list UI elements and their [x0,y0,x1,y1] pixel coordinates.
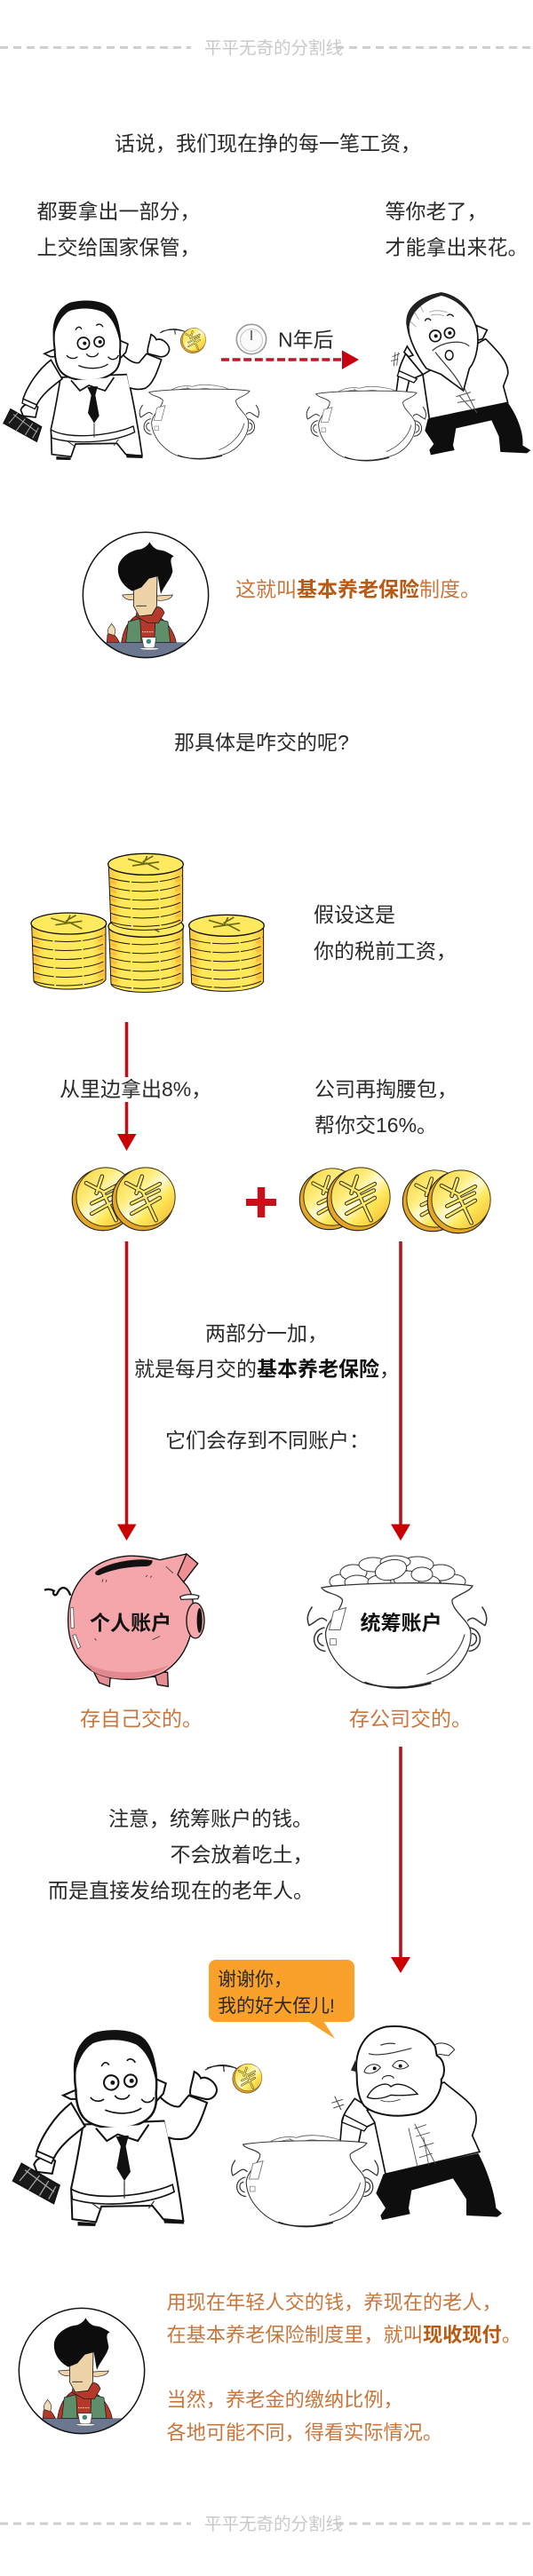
piggy bank [44,1554,204,1686]
speech bubble: 我的好大侄儿! [218,1996,335,2017]
closing text: 在基本养老保险制度里，就叫现收现付。 [167,2324,521,2346]
middle explanation: 它们会存到不同账户： [165,1429,370,1452]
callout: basic pension: 这就叫基本养老保险制度。 [235,577,481,600]
divider bottom: 平平无奇的分割线 [204,2515,343,2534]
young man with coin [4,301,186,460]
text 16% [314,1078,457,1137]
salary text: 假设这是 [314,903,395,926]
middle explanation: 两部分一加， [205,1321,328,1344]
arrow: personal to account [117,1241,137,1541]
coins: personal pair [72,1168,175,1231]
note text: 而是直接发给现在的老年人。 [48,1879,314,1902]
coin tossed [180,328,206,353]
middle explanation [134,1321,400,1452]
salary text: 你的税前工资， [314,939,457,963]
salary text [314,903,457,963]
divider top: 平平无奇的分割线 [204,39,343,59]
speech bubble [209,1960,354,2039]
closing text: 各地可能不同，得看实际情况。 [167,2421,442,2444]
label: personal account: 个人账户 [90,1611,171,1634]
right intro text: 才能拿出来花。 [386,236,528,259]
old man 2 [331,2026,502,2220]
pot 1 [139,384,259,459]
closing text: 当然，养老金的缴纳比例， [167,2389,403,2411]
plus [246,1187,276,1217]
closing text [167,2291,521,2444]
coins: company pair 1 [299,1168,390,1231]
coin stacks [31,853,264,992]
right intro text: 等你老了， [386,200,487,223]
note text [48,1807,314,1902]
closing text: 用现在年轻人交的钱，养现在的老人， [167,2291,502,2314]
caption right: 存公司交的。 [349,1707,472,1730]
middle explanation: 就是每月交的基本养老保险， [134,1357,400,1380]
label: pooled account: 统筹账户 [361,1611,442,1634]
text 16%: 公司再掏腰包， [314,1078,457,1101]
text 8%: 从里边拿出8%， [60,1078,211,1101]
left intro text: 上交给国家保管， [37,236,201,259]
note text: 注意，统筹账户的钱。 [108,1807,313,1830]
left intro text [37,200,201,259]
pot 2 [306,386,426,461]
old man [391,292,530,455]
avatar 2 [12,2308,154,2442]
speech bubble: 谢谢你， [218,1970,292,1990]
account pot with heaped coins [307,1556,487,1688]
pot 3 [232,2136,378,2227]
note text: 不会放着吃土， [171,1843,313,1867]
arrow: company to account [391,1241,410,1541]
icon: clock [236,324,266,354]
avatar 1 [76,532,218,666]
young man 2 [13,2030,237,2226]
N years later label: N年后 [278,329,334,352]
coin tossed 2 [233,2064,262,2093]
intro heading: 话说，我们现在挣的每一笔工资， [115,131,421,155]
arrow: take out 8% [117,1022,137,1151]
text 16%: 帮你交16%。 [314,1114,437,1137]
question: 那具体是咋交的呢? [174,731,349,754]
dashed arrow [221,350,359,369]
caption left: 存自己交的。 [80,1707,203,1730]
coins: company pair 2 [402,1170,490,1233]
left intro text: 都要拿出一部分， [37,200,201,223]
right intro text [386,200,528,259]
arrow to old man [391,1747,410,1973]
